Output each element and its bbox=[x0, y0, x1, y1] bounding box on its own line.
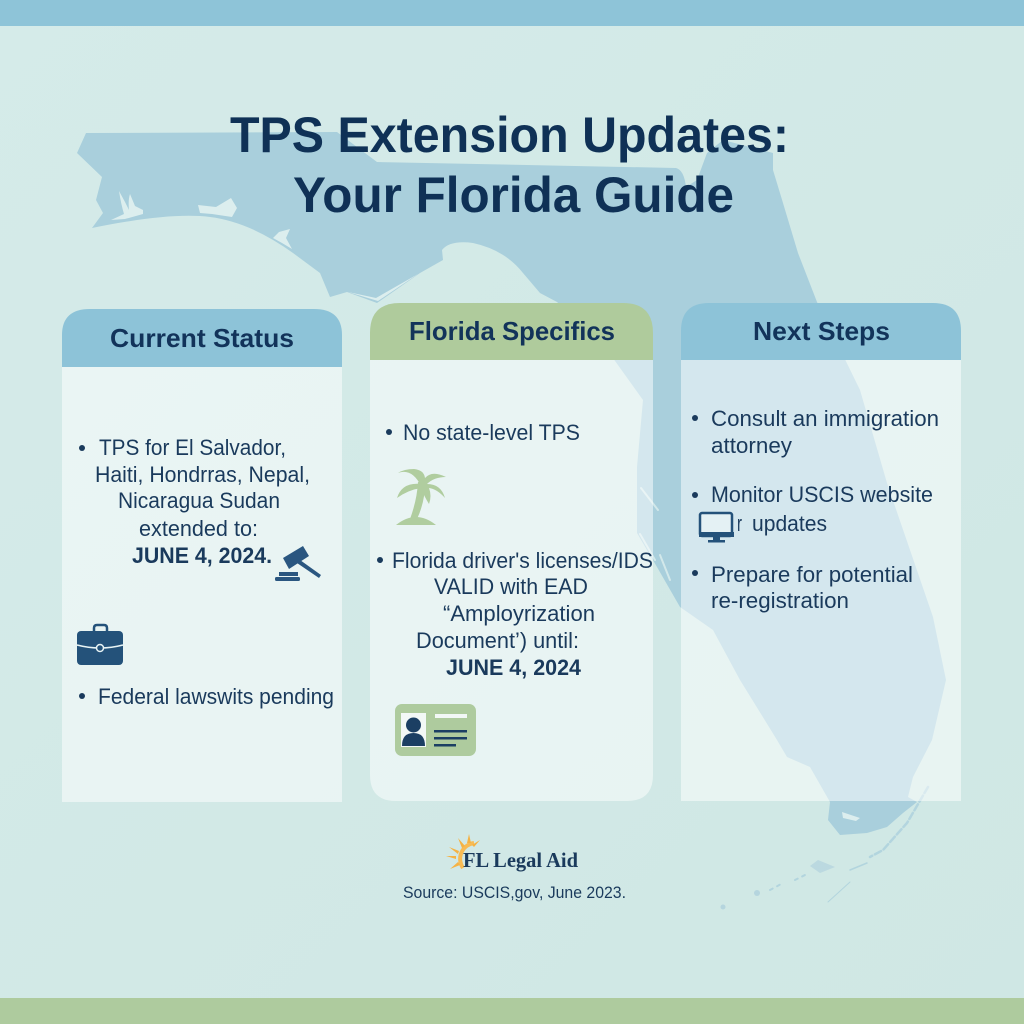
text: TPS countries: JUNE 4, 2024. bbox=[132, 543, 272, 568]
bottom band bbox=[0, 998, 1024, 1024]
title: Your Florida Guide bbox=[293, 167, 734, 223]
text: drivers licenses: Florida driver's licenses/IDS bbox=[392, 548, 653, 573]
icon: briefcase bbox=[77, 625, 123, 665]
panel: next steps bbox=[681, 303, 961, 801]
header: florida specifics bbox=[370, 303, 653, 360]
icon: sun bbox=[446, 834, 480, 869]
text: re-registration bbox=[692, 562, 913, 613]
logo: FL Legal Aid: FL Legal Aid bbox=[463, 848, 578, 872]
header: next steps: Next Steps bbox=[753, 316, 890, 346]
text: monitor USCIS: r bbox=[737, 511, 742, 536]
text: drivers licenses: VALID with EAD bbox=[434, 574, 588, 599]
text: no state-level TPS: No state-level TPS bbox=[403, 420, 580, 445]
icon: ID card bbox=[395, 704, 476, 756]
text: consult attorney: Consult an immigration bbox=[711, 406, 939, 431]
text: consult attorney: attorney bbox=[711, 433, 792, 458]
text: TPS countries bbox=[79, 435, 310, 568]
source line: Source: USCIS,gov, June 2023. bbox=[403, 883, 626, 902]
icon: computer monitor bbox=[699, 513, 734, 542]
icon: gavel bbox=[275, 546, 321, 581]
text: drivers licenses bbox=[377, 548, 653, 680]
text: monitor USCIS: Monitor USCIS website bbox=[711, 482, 933, 507]
icon: palm tree bbox=[396, 469, 446, 525]
text: TPS countries: Haiti, Hondrras, Nepal, bbox=[95, 462, 310, 487]
top band bbox=[0, 0, 1024, 26]
text: drivers licenses: JUNE 4, 2024 bbox=[446, 655, 582, 680]
text: re-registration: re-registration bbox=[711, 588, 849, 613]
text: TPS countries: TPS for El Salvador, bbox=[99, 435, 286, 460]
background map of Florida bbox=[77, 132, 946, 910]
panel: current status bbox=[62, 309, 342, 802]
text: TPS countries: Nicaragua Sudan bbox=[118, 488, 280, 513]
text: re-registration: Prepare for potential bbox=[711, 562, 913, 587]
text: federal lawsuits: Federal lawswits pending bbox=[98, 684, 334, 709]
header: next steps bbox=[681, 303, 961, 360]
title: TPS Extension Updates: bbox=[230, 107, 789, 163]
header: florida specifics: Florida Specifics bbox=[409, 316, 615, 346]
text: consult attorney bbox=[692, 406, 939, 458]
text: TPS countries: extended to: bbox=[139, 516, 258, 541]
panel: florida specifics bbox=[370, 303, 653, 801]
text: drivers licenses: Document’) until: bbox=[416, 628, 579, 653]
title bbox=[230, 107, 789, 223]
logo: FL Legal Aid bbox=[446, 834, 578, 872]
text: monitor USCIS: updates bbox=[752, 511, 827, 536]
florida keys bbox=[770, 787, 928, 902]
text: drivers licenses: “Amployrization bbox=[443, 601, 595, 626]
text: monitor USCIS bbox=[692, 482, 933, 536]
header: current status: Current Status bbox=[110, 323, 294, 353]
header: current status bbox=[62, 309, 342, 367]
